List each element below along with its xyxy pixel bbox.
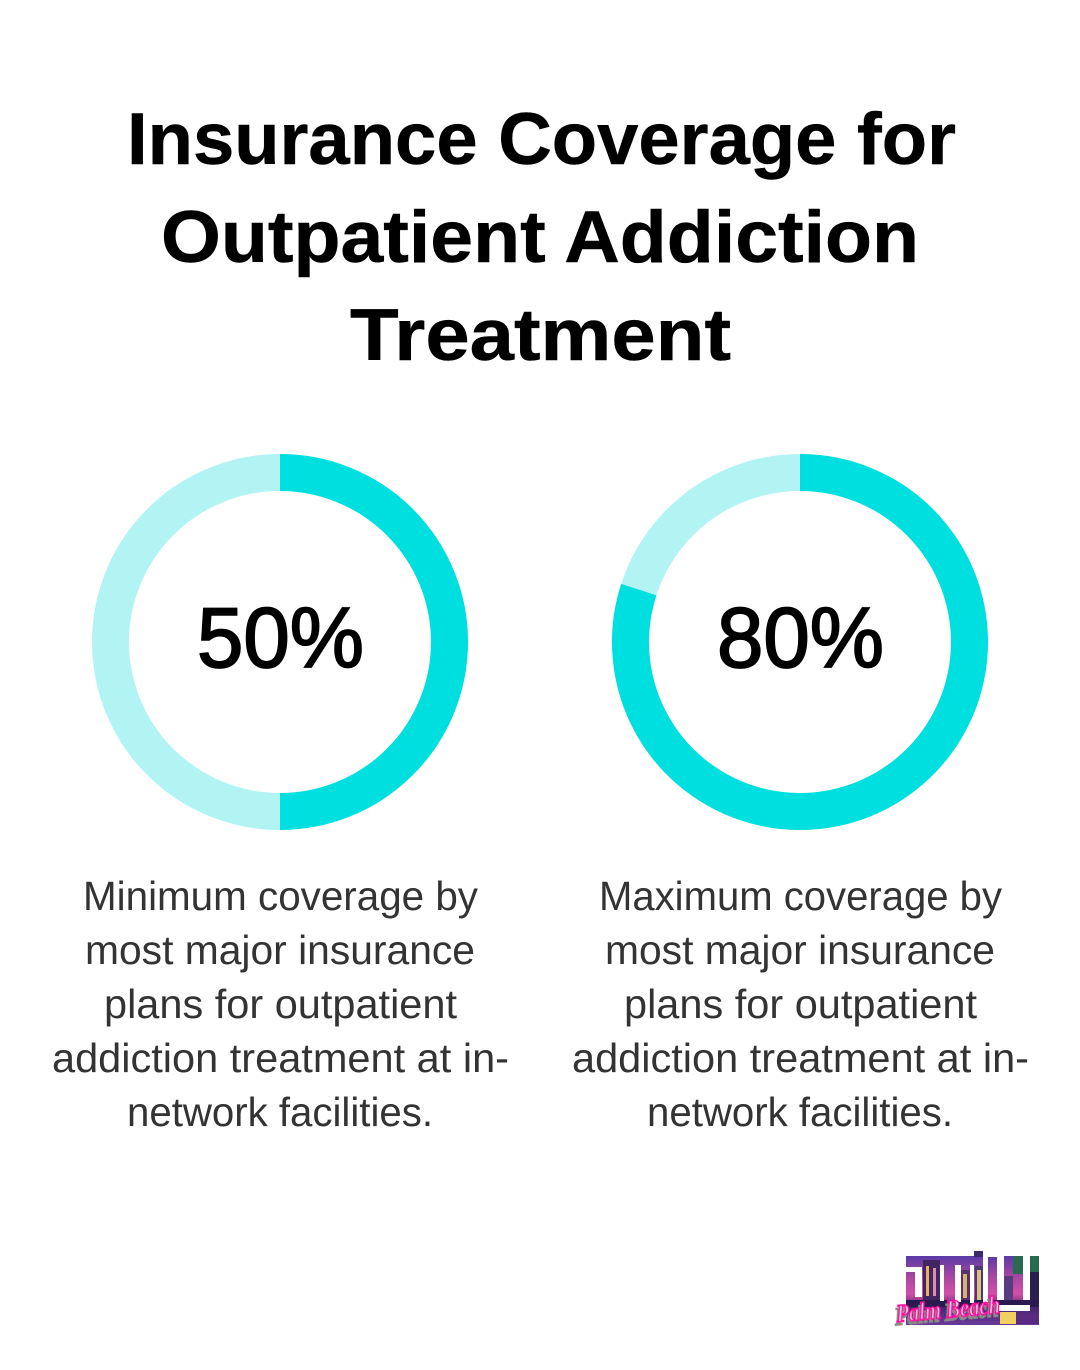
- title: Insurance Coverage for: [127, 99, 956, 180]
- description: minimum coverage: network facilities.: [127, 1089, 433, 1135]
- description: maximum coverage: most major insurance: [605, 927, 995, 973]
- title: [127, 99, 956, 376]
- description: maximum coverage: [572, 873, 1029, 1135]
- description: maximum coverage: Maximum coverage by: [599, 873, 1002, 919]
- value: 80%: 80%: [717, 591, 884, 686]
- logo letter gaps: [906, 1256, 1030, 1311]
- value: 50%: 50%: [197, 591, 364, 686]
- panel: maximum coverage 80%: [572, 472, 1029, 1135]
- description: minimum coverage: addiction treatment at in-: [52, 1035, 509, 1081]
- description: minimum coverage: plans for outpatient: [104, 981, 458, 1027]
- title: Treatment: [350, 295, 731, 376]
- logo city skyline: [906, 1256, 1039, 1324]
- logo script: Palm Beach: Palm Beach: [894, 1292, 1001, 1328]
- donut chart: 80%: [630, 472, 970, 812]
- panel: minimum coverage 50%: [52, 472, 509, 1135]
- title: Outpatient Addiction: [161, 197, 919, 278]
- description: minimum coverage: [52, 873, 509, 1135]
- description: maximum coverage: addiction treatment at in-: [572, 1035, 1029, 1081]
- logo: Amity Palm Beach: [894, 1251, 1039, 1328]
- donut chart: 50%: [110, 472, 450, 812]
- description: minimum coverage: most major insurance: [85, 927, 475, 973]
- description: maximum coverage: network facilities.: [647, 1089, 953, 1135]
- description: minimum coverage: Minimum coverage by: [83, 873, 478, 919]
- description: maximum coverage: plans for outpatient: [624, 981, 978, 1027]
